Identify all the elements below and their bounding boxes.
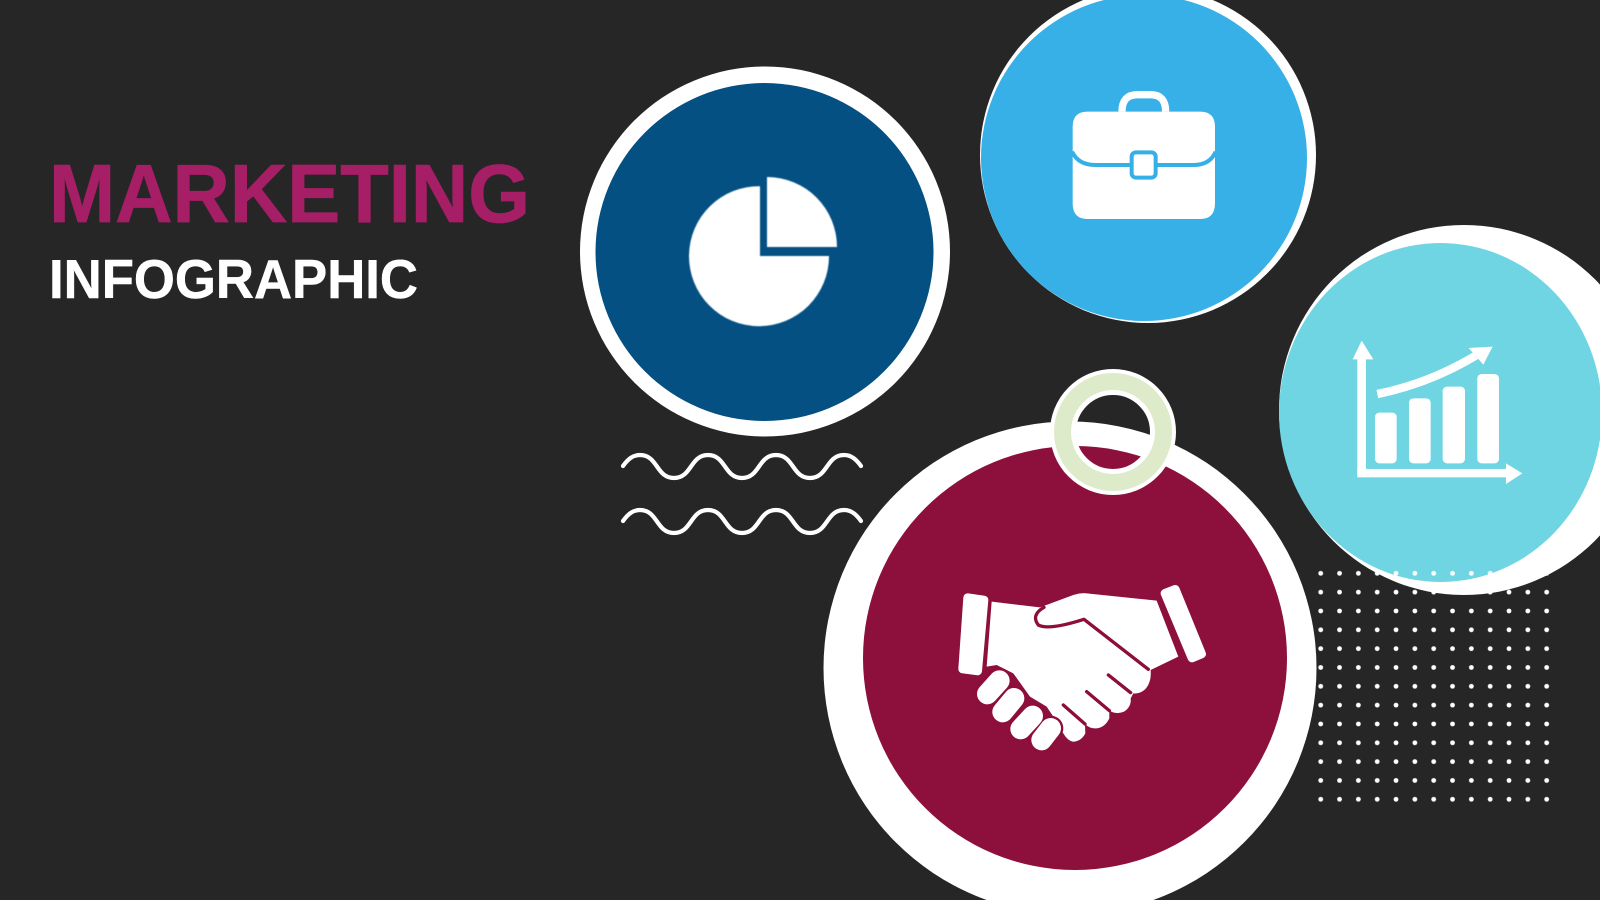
panel: teal growth chart circle xyxy=(1279,225,1600,595)
icon: handshake xyxy=(963,589,1202,742)
icon: pie chart xyxy=(689,177,837,326)
panel: crimson handshake circle xyxy=(824,422,1316,900)
heading: marketing: MARKETING xyxy=(49,147,530,240)
title block xyxy=(49,147,530,310)
decorative waves xyxy=(623,455,861,533)
dot grid xyxy=(1311,564,1556,809)
icon: bar chart with growth arrow xyxy=(1353,341,1522,484)
panel: light blue briefcase circle xyxy=(980,0,1316,323)
icon: briefcase xyxy=(1072,95,1216,219)
subheading: infographic: INFOGRAPHIC xyxy=(49,248,418,310)
panel: dark blue pie chart circle xyxy=(580,66,950,436)
decorative ring xyxy=(1062,382,1164,482)
